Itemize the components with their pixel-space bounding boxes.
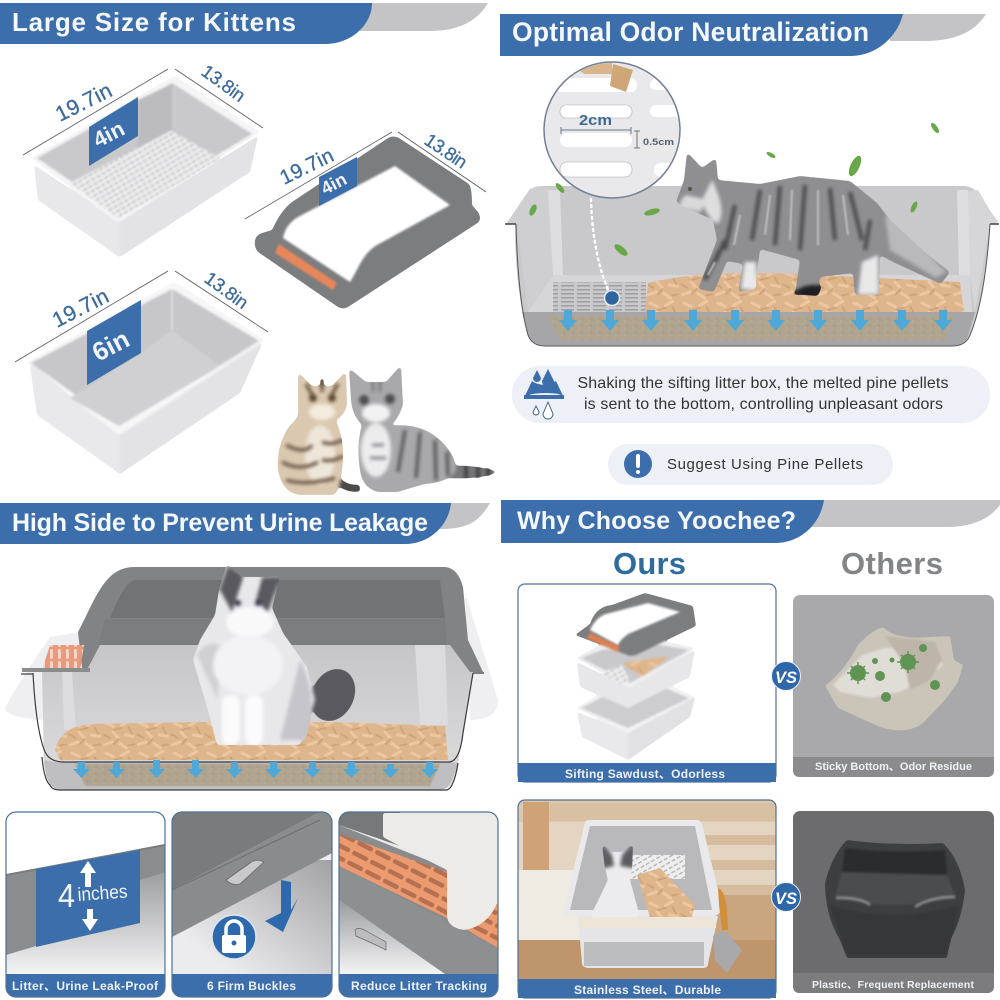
dimension labels tray 2	[15, 267, 268, 362]
litter box with high-side frame	[5, 567, 498, 790]
cutaway stainless litter box	[505, 186, 999, 346]
pale flange behind box	[5, 592, 498, 720]
floating green leaves	[528, 122, 940, 258]
info pill: shaking description: is sent to the bottom, controlling unpleasant odors	[584, 396, 943, 413]
heading banner: High Side to Prevent Urine Leakage: High Side to Prevent Urine Leakage	[12, 509, 428, 537]
VS badge top	[772, 662, 800, 690]
info pill: suggest pine pellets	[608, 444, 893, 485]
heading banner: High Side to Prevent Urine Leakage	[0, 503, 490, 544]
blue height label 6in	[87, 300, 141, 385]
tile: Stainless Steel, Durable	[518, 800, 776, 998]
tile: Reduce Litter Tracking	[339, 812, 498, 997]
pine pellets	[55, 722, 448, 760]
info pill: suggest pine pellets: Suggest Using Pine Pellets	[667, 456, 863, 473]
green germs	[847, 644, 940, 702]
column heading: Ours: Ours	[613, 546, 686, 581]
heading banner: Large Size for Kittens: Large Size for Kittens	[12, 7, 296, 37]
tile: Sticky Bottom, Odor Residue	[793, 595, 994, 777]
dimension labels frame: 13.8in	[421, 129, 471, 173]
blue height label 4in	[89, 97, 138, 166]
tile: 6 Firm Buckles	[172, 812, 332, 997]
dimension labels tray 2: 19.7in	[48, 284, 113, 332]
blue height label 4in: 4in	[89, 116, 129, 152]
open tray, 6in	[15, 267, 268, 474]
grey high side frame	[78, 567, 483, 672]
blue height label 4in: 4in	[318, 169, 350, 199]
blue height label 4in	[318, 157, 357, 206]
label 0.5cm: 0.5cm	[643, 137, 674, 148]
tile: Litter, Urine Leak-Proof	[6, 812, 165, 997]
tray with sifting mesh, 4in	[23, 60, 263, 257]
info pill: shaking description	[512, 366, 990, 423]
marker dot	[604, 290, 620, 306]
room scene background	[518, 800, 776, 822]
caption: Sifting Sawdust、Odorless	[565, 767, 725, 781]
heading banner: Optimal Odor Neutralization	[500, 14, 986, 56]
caption: Stainless Steel、Durable	[574, 983, 721, 997]
panel: High Side to Prevent Urine Leakage	[0, 503, 498, 997]
blue label: 4 inches: 4	[58, 877, 75, 914]
tile: Plastic, Frequent Replacement	[793, 811, 994, 993]
blue drain arrows	[559, 310, 952, 331]
icon: sieve with drops	[524, 369, 564, 419]
caption: Plastic、Frequent Replacement	[812, 979, 974, 991]
dotted pointer to slot	[591, 199, 612, 298]
magnifier: slot dimensions	[544, 60, 684, 198]
caption: Reduce Litter Tracking	[351, 979, 487, 993]
illustration: tabby cat walking	[676, 152, 950, 296]
caption: Sticky Bottom、Odor Residue	[815, 761, 972, 773]
description text: Shaking the sifting litter box, the melted pine pellets	[578, 375, 948, 392]
pine pellets on sifting floor	[645, 273, 964, 312]
blue label: 4 inches	[36, 850, 140, 947]
panel: Large Size for Kittens	[0, 3, 498, 495]
illustration: cat paw	[383, 813, 498, 930]
illustration: ragdoll cat sitting	[193, 564, 363, 745]
blue height label 6in: 6in	[87, 324, 134, 367]
dimension labels tray 1: 19.7in	[52, 78, 116, 126]
heading banner: Why Choose Yoochee?	[501, 500, 1000, 543]
column heading: Others: Others	[841, 546, 943, 581]
stacked litter box parts	[575, 593, 696, 760]
arrow: press down	[265, 880, 298, 932]
dimension labels frame: 19.7in	[276, 144, 337, 189]
dimension labels tray 1: 13.8in	[198, 60, 250, 106]
dimension labels tray 1	[23, 60, 263, 155]
caption: 6 Firm Buckles	[207, 979, 296, 993]
label 2cm: 2cm	[579, 112, 612, 129]
heading banner: Large Size for Kittens	[0, 3, 488, 44]
icon: padlock	[212, 915, 256, 959]
blue drain arrows	[73, 760, 438, 778]
panel: Optimal Odor Neutralization	[500, 14, 999, 485]
VS badge bottom	[772, 882, 800, 912]
panel: Why Choose Yoochee?	[501, 500, 1000, 998]
blue label: 4 inches: inches	[77, 882, 128, 906]
dirty beige tray	[825, 627, 963, 730]
dark plastic tray	[825, 840, 965, 958]
metal scoop	[713, 888, 742, 973]
caption: Litter、Urine Leak-Proof	[12, 979, 159, 993]
heading banner: Optimal Odor Neutralization: Optimal Odor Neutralization	[512, 17, 869, 47]
dimension labels tray 2: 13.8in	[201, 267, 253, 313]
illustration: two kittens	[278, 365, 498, 495]
steel litter box with kitten	[563, 820, 722, 968]
icon: exclamation	[624, 450, 652, 478]
heading banner: Why Choose Yoochee?: Why Choose Yoochee?	[517, 507, 796, 535]
VS badge bottom: VS	[775, 889, 798, 908]
VS badge top: VS	[775, 668, 798, 687]
grey frame lid, 4in	[245, 129, 486, 308]
dimension labels frame	[245, 129, 486, 219]
tile: Sifting Sawdust, Odorless	[518, 584, 776, 782]
orange mat on step	[42, 645, 84, 670]
